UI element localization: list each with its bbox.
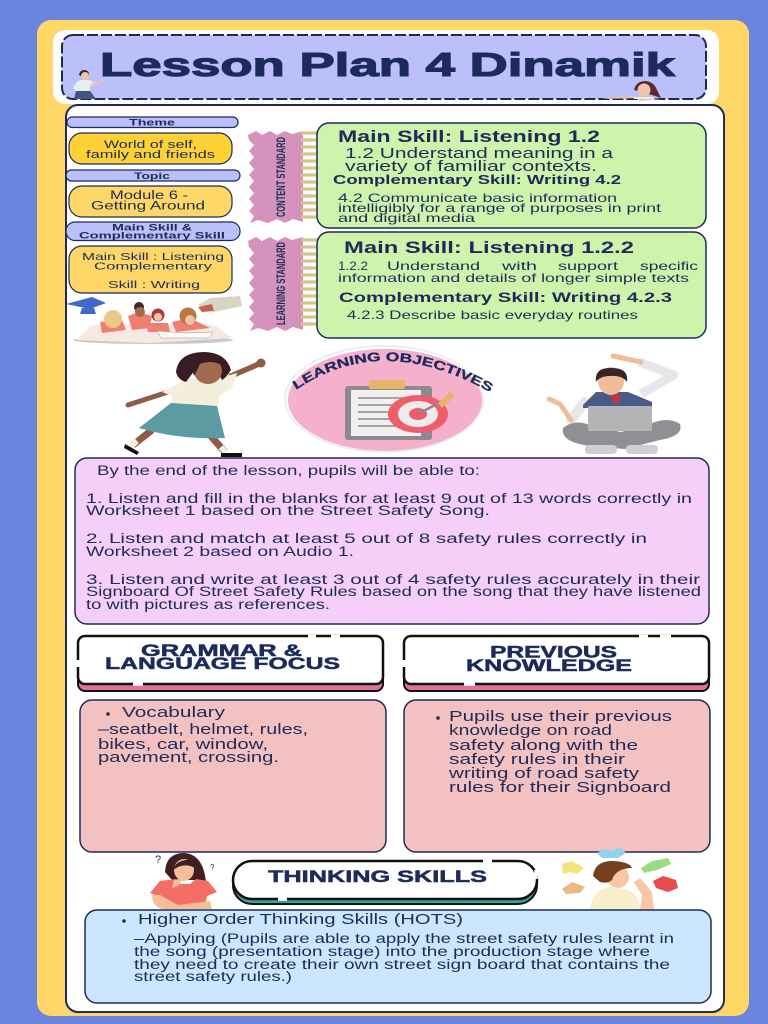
main white panel (66, 105, 724, 1012)
icon: learning objectives badge: LEARNING OBJECTIVES (292, 352, 493, 391)
panel: learning objectives: 2. Listen and match at least 5 out of 8 safety rules correctly in (86, 531, 647, 546)
panel: thinking skills content: street safety rules.) (134, 969, 292, 984)
label: content standard notebook (248, 131, 321, 223)
heading: grammar and language focus: GRAMMAR & (141, 642, 302, 660)
panel: content standard: Main Skill: Listening 1.2 (338, 128, 600, 146)
topic label: Topic (134, 171, 170, 181)
target and arrow (388, 392, 455, 433)
skills value: Main Skill : Listening (82, 251, 224, 263)
theme label: Theme (129, 118, 175, 128)
panel: grammar content: Vocabulary (122, 705, 226, 721)
panel: previous knowledge content (404, 700, 710, 852)
icon: learning objectives badge (284, 345, 493, 453)
panel: previous knowledge content: safety along with the (449, 738, 638, 754)
panel: thinking skills content: –Applying (Pupils are able to apply the street safety rules learnt in (134, 931, 674, 946)
panel: learning standard: Main Skill: Listening 1.2.2 (344, 239, 634, 257)
panel: content standard (317, 123, 706, 228)
icon: thinking girl (150, 853, 217, 909)
label: content standard notebook: CONTENT STANDARD (274, 137, 288, 217)
heading: previous knowledge (404, 636, 709, 691)
panel: grammar content: pavement, crossing. (98, 750, 279, 766)
panel: content standard: variety of familiar contexts. (345, 159, 597, 175)
skills value: Complementary (94, 260, 213, 272)
spiral binding (301, 240, 321, 324)
panel: previous knowledge content: Pupils use their previous (449, 709, 672, 725)
panel: learning standard: Complementary Skill: Writing 4.2.3 (339, 290, 673, 305)
theme value: family and friends (86, 149, 216, 161)
panel: theme, topic and skill sidebar (66, 117, 240, 293)
theme value: World of self, (104, 139, 197, 151)
panel: learning standard (317, 232, 706, 338)
label: learning standard notebook (248, 237, 321, 331)
panel: content standard: 4.2 Communicate basic information (338, 191, 617, 205)
title text: Lesson Plan 4 Dinamik (100, 46, 676, 83)
icon: students reading together (66, 296, 242, 344)
icon: thinking girl: ? (210, 863, 215, 872)
topic label (66, 170, 240, 181)
heading: grammar and language focus (78, 636, 383, 691)
heading: previous knowledge: PREVIOUS (490, 644, 617, 662)
heading: previous knowledge: KNOWLEDGE (466, 657, 632, 675)
spiral binding (301, 133, 321, 217)
panel: thinking skills content (85, 910, 711, 1003)
panel: learning standard: specific (640, 259, 698, 273)
panel: thinking skills content: they need to create their own street sign board that contains the (134, 957, 670, 972)
skills label: Main Skill & (112, 222, 193, 232)
topic value: Getting Around (91, 200, 205, 212)
topic value (69, 186, 232, 217)
panel: learning objectives: Worksheet 2 based on Audio 1. (86, 544, 354, 559)
heading: thinking skills (233, 861, 537, 904)
panel: learning standard: support (558, 259, 619, 273)
panel: learning standard: information and details of longer simple texts (338, 271, 689, 285)
label: learning standard notebook: LEARNING STANDARD (274, 242, 288, 325)
skills label (66, 222, 240, 240)
heading: thinking skills: THINKING SKILLS (268, 868, 487, 886)
panel: previous knowledge content: safety rules in their (449, 752, 625, 768)
panel: learning objectives (75, 458, 709, 624)
panel: grammar content: –seatbelt, helmet, rules, (98, 722, 308, 738)
topic value: Module 6 - (110, 190, 188, 202)
panel: thinking skills content: the song (presentation stage) into the production stage where (134, 944, 650, 959)
panel: learning objectives: 3. Listen and write at least 3 out of 4 safety rules accurately in their (86, 572, 701, 587)
panel: grammar content: bikes, car, window, (98, 737, 268, 753)
curved badge title (296, 361, 486, 390)
heading: grammar and language focus: LANGUAGE FOCUS (105, 655, 340, 673)
panel: learning objectives: Worksheet 1 based on the Street Safety Song. (86, 503, 490, 518)
panel: learning objectives: Signboard Of Street Safety Rules based on the song that they have listened (86, 584, 701, 599)
panel: learning standard: Understand (387, 259, 480, 273)
panel: learning objectives: 1. Listen and fill in the blanks for at least 9 out of 13 words correctly in (86, 491, 692, 506)
panel: previous knowledge content: writing of road safety (448, 766, 640, 782)
panel: content standard: Complementary Skill: Writing 4.2 (333, 172, 621, 187)
panel: learning standard: 4.2.3 Describe basic everyday routines (347, 308, 638, 322)
panel: previous knowledge content: rules for their Signboard (449, 780, 671, 796)
icon: thinking boy with puzzle pieces (562, 847, 678, 910)
icon: girl in school uniform pointing (124, 352, 266, 457)
skills label: Complementary Skill (79, 230, 225, 240)
panel: grammar content (80, 700, 386, 852)
theme label (67, 117, 238, 128)
theme value (69, 133, 232, 164)
panel: learning standard: with (500, 259, 537, 273)
title banner (53, 30, 719, 104)
panel: learning objectives: to with pictures as references. (86, 597, 330, 612)
skills value (69, 246, 232, 293)
icon: thinking girl: ? (155, 854, 161, 866)
panel: content standard: intelligibly for a range of purposes in print (338, 201, 662, 215)
icon: teacher pointing (73, 70, 103, 99)
panel: learning objectives: By the end of the lesson, pupils will be able to: (97, 463, 480, 478)
panel: learning standard: 1.2.2 (338, 259, 368, 273)
panel: previous knowledge content: knowledge on road (449, 723, 612, 739)
clipboard (345, 380, 432, 440)
panel: thinking skills content: Higher Order Thinking Skills (HOTS) (138, 912, 463, 928)
panel: content standard: 1.2 Understand meaning in a (345, 146, 614, 162)
panel: content standard: and digital media (338, 211, 475, 225)
icon: girl leaning on banner (601, 81, 662, 101)
icon: boy with laptop pointing (549, 356, 681, 454)
skills value: Skill : Writing (108, 279, 200, 291)
